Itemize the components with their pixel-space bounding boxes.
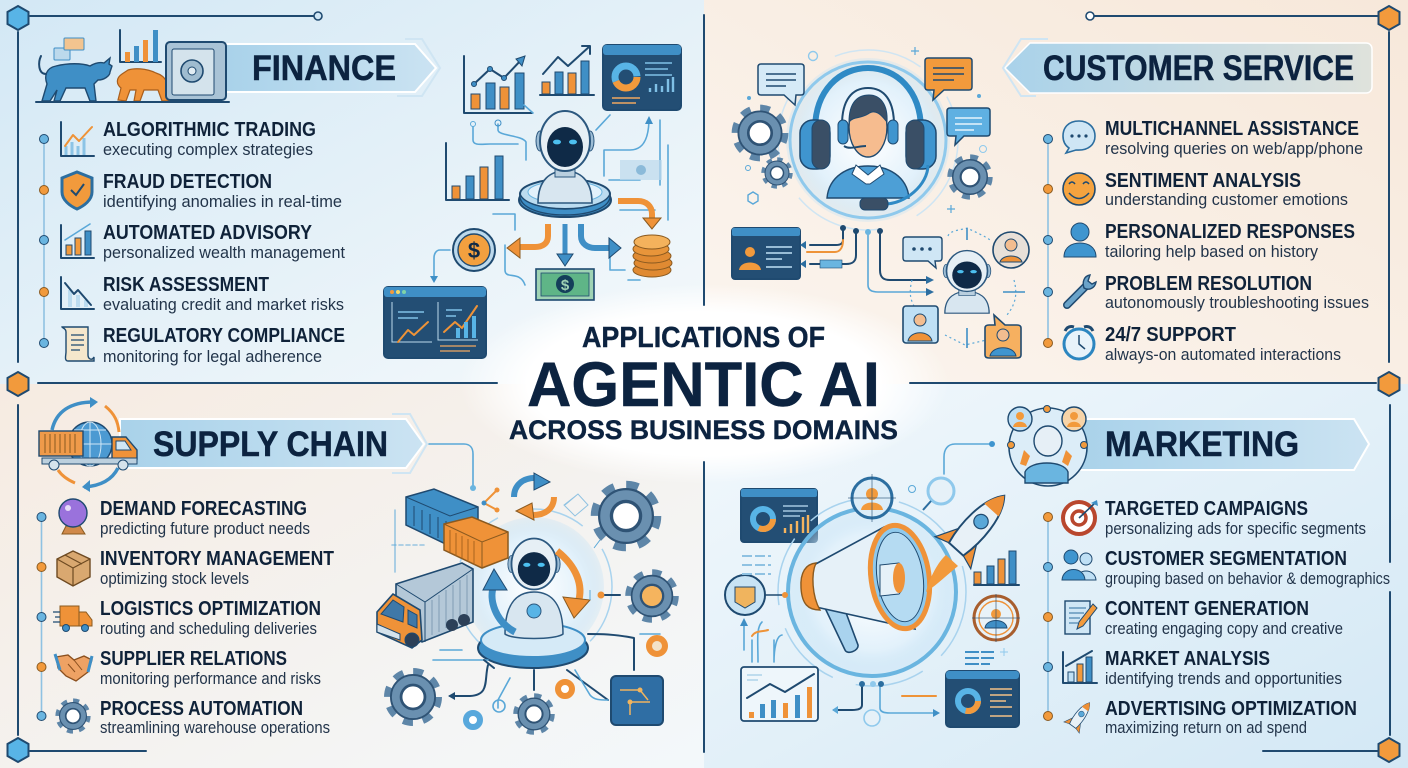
marketing banner: MARKETING: [1105, 425, 1299, 464]
item: targeted campaigns: personalizing ads for specific segments: [1105, 520, 1366, 538]
item: supplier relations: monitoring performance and risks: [100, 670, 321, 688]
item: targeted campaigns: TARGETED CAMPAIGNS: [1105, 498, 1308, 520]
item: content generation: CONTENT GENERATION: [1105, 598, 1309, 620]
marketing illustration: rocket: [926, 480, 1022, 592]
item: multichannel assistance: resolving queries on web/app/phone: [1105, 140, 1363, 158]
item: fraud detection: [62, 171, 342, 211]
item: multichannel assistance: [1063, 118, 1363, 158]
item: fraud detection: identifying anomalies in real-time: [103, 193, 342, 211]
customer illustration: decorative nodes: [746, 47, 986, 213]
finance illustration: robot on platform: [519, 111, 611, 217]
item: process automation: streamlining warehouse operations: [100, 719, 330, 737]
item: automated advisory: [61, 222, 345, 262]
item: process automation: PROCESS AUTOMATION: [100, 698, 303, 720]
customer illustration: gears: [736, 109, 989, 196]
item: problem resolution: autonomously troubleshooting issues: [1105, 294, 1369, 312]
central title: [509, 322, 898, 445]
item: regulatory compliance: REGULATORY COMPLIANCE: [103, 325, 345, 347]
item: algorithmic trading: executing complex strategies: [103, 141, 313, 159]
supply illustration: gears: [388, 486, 675, 732]
customer illustration: speech bubbles: [758, 58, 990, 145]
item: demand forecasting: predicting future product needs: [100, 520, 310, 538]
item: customer segmentation: CUSTOMER SEGMENTATION: [1105, 548, 1347, 570]
item: supplier relations: [55, 648, 321, 688]
supply illustration: connectors: [392, 510, 660, 712]
item: demand forecasting: [59, 498, 310, 538]
panel: marketing: [725, 406, 1390, 737]
item: content generation: creating engaging copy and creative: [1105, 620, 1343, 638]
customer service banner: [1003, 39, 1372, 96]
item: inventory management: [57, 548, 334, 588]
supply illustration: circuit chip: [611, 676, 663, 725]
icon: dollar coin: [453, 229, 495, 271]
item: content generation: [1065, 598, 1343, 638]
item: supplier relations: SUPPLIER RELATIONS: [100, 648, 287, 670]
icon: audience circle: [1008, 406, 1088, 486]
supply chain banner: [120, 414, 427, 473]
icon: banknote: [536, 269, 594, 300]
customer illustration: robot chat and avatars: [903, 232, 1029, 358]
item: 24/7 support: [1064, 324, 1341, 364]
item: market analysis: identifying trends and opportunities: [1105, 670, 1342, 688]
marketing illustration: bottom dashboard: [946, 671, 1019, 727]
item: risk assessment: evaluating credit and market risks: [103, 296, 344, 314]
panel: customer service: [732, 39, 1372, 364]
finance banner: FINANCE: [252, 49, 396, 88]
marketing illustration: chart card: [741, 667, 818, 721]
panel: finance: [36, 30, 681, 366]
icon: banknote: $: [561, 277, 570, 294]
item: regulatory compliance: [62, 325, 345, 366]
supply illustration: sync arrows: [514, 473, 554, 520]
item: process automation: [58, 698, 330, 737]
item: algorithmic trading: [61, 119, 316, 159]
item: logistics optimization: routing and scheduling deliveries: [100, 620, 317, 638]
icon: dollar coin: $: [468, 238, 480, 263]
finance banner: [225, 39, 440, 96]
item: advertising optimization: maximizing return on ad spend: [1105, 719, 1307, 737]
marketing illustration: small bar chart: [974, 551, 1019, 585]
item: advertising optimization: [1064, 697, 1357, 737]
customer service list timeline: [1044, 134, 1052, 348]
item: automated advisory: AUTOMATED ADVISORY: [103, 222, 313, 244]
finance illustration: charts: [446, 46, 594, 200]
supply chain banner: SUPPLY CHAIN: [153, 425, 388, 464]
item: multichannel assistance: MULTICHANNEL ASSISTANCE: [1105, 118, 1359, 140]
customer service banner: CUSTOMER SERVICE: [1043, 49, 1354, 88]
panel: supply chain: [37, 397, 675, 737]
item: regulatory compliance: monitoring for legal adherence: [103, 348, 322, 366]
item: personalized responses: PERSONALIZED RESPONSES: [1105, 221, 1355, 243]
title line: applications of: APPLICATIONS OF: [582, 322, 825, 354]
supply illustration: robot with cycle arrows: [456, 509, 612, 668]
item: sentiment analysis: [1063, 170, 1348, 209]
item: logistics optimization: LOGISTICS OPTIMIZATION: [100, 598, 321, 620]
supply illustration: link from banner: [429, 444, 588, 516]
item: inventory management: INVENTORY MANAGEMENT: [100, 548, 334, 570]
item: sentiment analysis: SENTIMENT ANALYSIS: [1105, 170, 1301, 192]
item: 24/7 support: always-on automated interactions: [1105, 346, 1341, 364]
item: inventory management: optimizing stock levels: [100, 570, 249, 588]
item: sentiment analysis: understanding customer emotions: [1105, 191, 1348, 209]
customer illustration: profile window: [732, 228, 800, 279]
item: risk assessment: [61, 274, 344, 314]
icon: coin stack: [633, 235, 672, 277]
item: demand forecasting: DEMAND FORECASTING: [100, 498, 307, 520]
finance illustration: circuit connectors: [430, 105, 668, 285]
finance illustration: dashboard bottom: [384, 287, 486, 358]
marketing illustration: top dashboard: [741, 489, 817, 542]
item: problem resolution: [1067, 273, 1369, 312]
supply illustration: shipping containers: [406, 489, 508, 568]
item: risk assessment: RISK ASSESSMENT: [103, 274, 269, 296]
item: customer segmentation: [1062, 548, 1390, 588]
finance illustration: dashboard top: [603, 45, 681, 110]
finance illustration: output arrows: [507, 201, 661, 266]
customer illustration: headset agent: [778, 50, 958, 230]
item: advertising optimization: ADVERTISING OPTIMIZATION: [1105, 698, 1357, 720]
supply chain list timeline: [37, 512, 46, 720]
marketing illustration: target icons: [725, 474, 1020, 642]
item: 24/7 support: 24/7 SUPPORT: [1105, 324, 1236, 346]
icon: bull, bear and safe: [36, 30, 229, 102]
item: targeted campaigns: [1063, 498, 1366, 538]
item: logistics optimization: [53, 598, 321, 638]
item: personalized responses: tailoring help based on history: [1105, 243, 1319, 261]
marketing list timeline: [1044, 512, 1052, 720]
item: market analysis: [1063, 648, 1342, 688]
marketing illustration: megaphone: [778, 498, 966, 686]
supply illustration: truck: [377, 563, 473, 648]
marketing banner: [1075, 419, 1369, 470]
item: personalized responses: [1064, 221, 1355, 261]
item: fraud detection: FRAUD DETECTION: [103, 171, 272, 193]
finance list timeline: [40, 134, 48, 348]
marketing illustration: connectors and data marks: [740, 556, 1008, 726]
customer illustration: connectors: [800, 225, 1025, 348]
marketing illustration: link to banner: [944, 441, 995, 474]
title line: agentic ai: AGENTIC AI: [527, 350, 880, 420]
item: automated advisory: personalized wealth management: [103, 244, 345, 262]
item: market analysis: MARKET ANALYSIS: [1105, 648, 1270, 670]
item: algorithmic trading: ALGORITHMIC TRADING: [103, 119, 316, 141]
item: problem resolution: PROBLEM RESOLUTION: [1105, 273, 1312, 295]
icon: globe truck with cycle arrows: [39, 397, 137, 492]
title line: across business domains: ACROSS BUSINESS DOMAINS: [509, 415, 898, 445]
customer illustration: support robot: [943, 251, 991, 313]
